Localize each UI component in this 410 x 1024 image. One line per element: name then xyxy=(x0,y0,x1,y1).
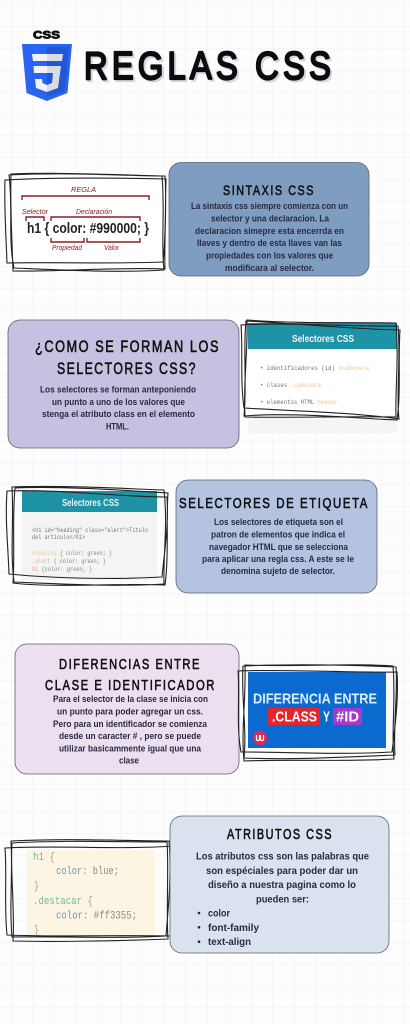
text block: stenga el atributo class en el elemento xyxy=(42,408,195,419)
heading: CLASE E IDENTIFICADOR xyxy=(45,678,216,694)
text block: navegador HTML que se selecciona xyxy=(209,541,349,552)
heading: SELECTORES CSS? xyxy=(57,360,197,378)
text block xyxy=(40,384,196,432)
text block xyxy=(196,852,369,906)
code lines xyxy=(33,852,137,937)
text block: declaracion simepre esta encerrda en xyxy=(195,225,344,236)
text block xyxy=(191,200,348,273)
connector: Y: Y xyxy=(323,708,330,726)
text block xyxy=(53,693,208,766)
heading: Selectores CSS xyxy=(292,333,354,345)
code lines: color: #ff3355; xyxy=(56,910,137,922)
text block: propiedades con los valores que xyxy=(206,250,333,260)
panel: selectores de etiqueta xyxy=(176,480,377,593)
icon: CSS3 logo xyxy=(22,30,72,101)
panel: sintaxis css xyxy=(169,162,369,276)
text block: Los atributos css son las palabras que xyxy=(196,852,369,862)
text block: utilizar basicammente igual que una xyxy=(59,742,202,754)
text block: denomina sujeto de selector. xyxy=(221,565,335,576)
heading: Selectores CSS xyxy=(62,498,119,509)
bracket: propiedad xyxy=(51,238,84,242)
code lines: color: blue; xyxy=(56,866,119,878)
code sample: del articulo</h1> xyxy=(32,534,85,541)
text block: selector y una declaracion. La xyxy=(211,212,330,224)
heading: DIFERENCIAS ENTRE xyxy=(59,657,201,673)
list item: element: • elementos HTML header xyxy=(260,399,338,406)
label: declaracion: Declaración xyxy=(76,207,112,216)
text block: Los selectores se forman anteponiendo xyxy=(40,384,196,394)
code sample xyxy=(32,527,148,573)
image: diferencia entre class e id xyxy=(238,665,397,761)
heading: ATRIBUTOS CSS xyxy=(227,827,333,843)
text block: La sintaxis css siempre comienza con un xyxy=(191,200,348,211)
code lines: } xyxy=(34,881,39,893)
bracket: valor xyxy=(87,238,140,242)
text block: patron de elementos que indica el xyxy=(211,528,345,540)
image: css code sample xyxy=(5,840,173,941)
heading: DIFERENCIA ENTRE xyxy=(253,690,377,708)
code lines: h1 { xyxy=(33,852,55,864)
code sample: h1 {color: green; } xyxy=(32,566,92,573)
list item: id: • identificadores (id) #cabecera xyxy=(260,365,369,372)
heading xyxy=(45,657,216,694)
text block: un punto a uno de los valores que xyxy=(52,396,185,407)
text block: HTML. xyxy=(106,420,129,432)
panel: como se forman los selectores xyxy=(8,320,239,448)
sketch frame xyxy=(241,320,400,420)
text block: son espéciales para poder dar un xyxy=(206,866,358,877)
text block: un punto para poder agregar un css. xyxy=(57,706,203,716)
bracket: declaracion xyxy=(51,217,140,221)
bullet list: font-family xyxy=(208,923,259,934)
code sample: #heading { color: green; } xyxy=(32,550,112,557)
text block: diseño a nuestra pagina como lo xyxy=(208,880,356,891)
sketch frame xyxy=(5,840,173,941)
text block xyxy=(202,516,354,576)
icon: CSS3 logo: CSS xyxy=(33,30,60,42)
text block: llaves y dentro de esta llaves van las xyxy=(197,237,342,248)
text block: modificara al selector. xyxy=(225,262,314,273)
image: selectores css code xyxy=(6,486,168,585)
bullet list xyxy=(198,908,259,948)
image: regla diagram xyxy=(5,173,166,271)
badge: class: .CLASS xyxy=(272,708,317,726)
heading xyxy=(35,338,220,378)
bullet list: color xyxy=(208,908,230,920)
code lines: .destacar { xyxy=(33,896,93,908)
heading: REGLA: REGLA xyxy=(71,185,96,194)
badge: id: #ID xyxy=(336,708,359,726)
panel: diferencias entre clase e identificador xyxy=(15,644,239,774)
text block: Pero para un identificador se comienza xyxy=(53,718,208,729)
text block: pueden ser: xyxy=(256,894,309,906)
sketch frame xyxy=(5,173,166,271)
bullet list: text-align xyxy=(208,937,251,948)
list item: class: • clases .cabecera xyxy=(260,382,321,389)
bracket: regla xyxy=(22,196,149,200)
text block: desde un caracter # , pero se puede xyxy=(59,730,201,741)
code sample: .alert { color: green; } xyxy=(32,558,106,565)
code lines: } xyxy=(34,925,39,937)
text block: Para el selector de la clase se inicia con xyxy=(53,693,208,704)
code sample: <h1 id="heading" class="alert">Titulo xyxy=(32,527,148,534)
code: css rule: h1 { color: #990000; } xyxy=(27,220,149,237)
image: selectores css list xyxy=(241,320,400,433)
icon: udemy logo xyxy=(253,731,267,745)
text block: clase xyxy=(119,754,139,766)
title: REGLAS CSS xyxy=(84,45,335,88)
sketch frame xyxy=(6,486,168,585)
label: selector: Selector xyxy=(22,207,48,216)
heading: ¿COMO SE FORMAN LOS xyxy=(35,338,220,356)
bracket: selector xyxy=(26,217,44,221)
text block: Los selectores de etiqueta son el xyxy=(214,516,343,527)
title: REGLAS CSS xyxy=(86,47,337,90)
heading: SINTAXIS CSS xyxy=(223,182,315,198)
panel: atributos css xyxy=(170,816,389,953)
sketch frame xyxy=(238,665,397,761)
label: propiedad: Propiedad xyxy=(52,243,83,252)
label: valor: Valor xyxy=(104,243,119,252)
text block: para aplicar una regla css. A este se le xyxy=(202,553,354,564)
